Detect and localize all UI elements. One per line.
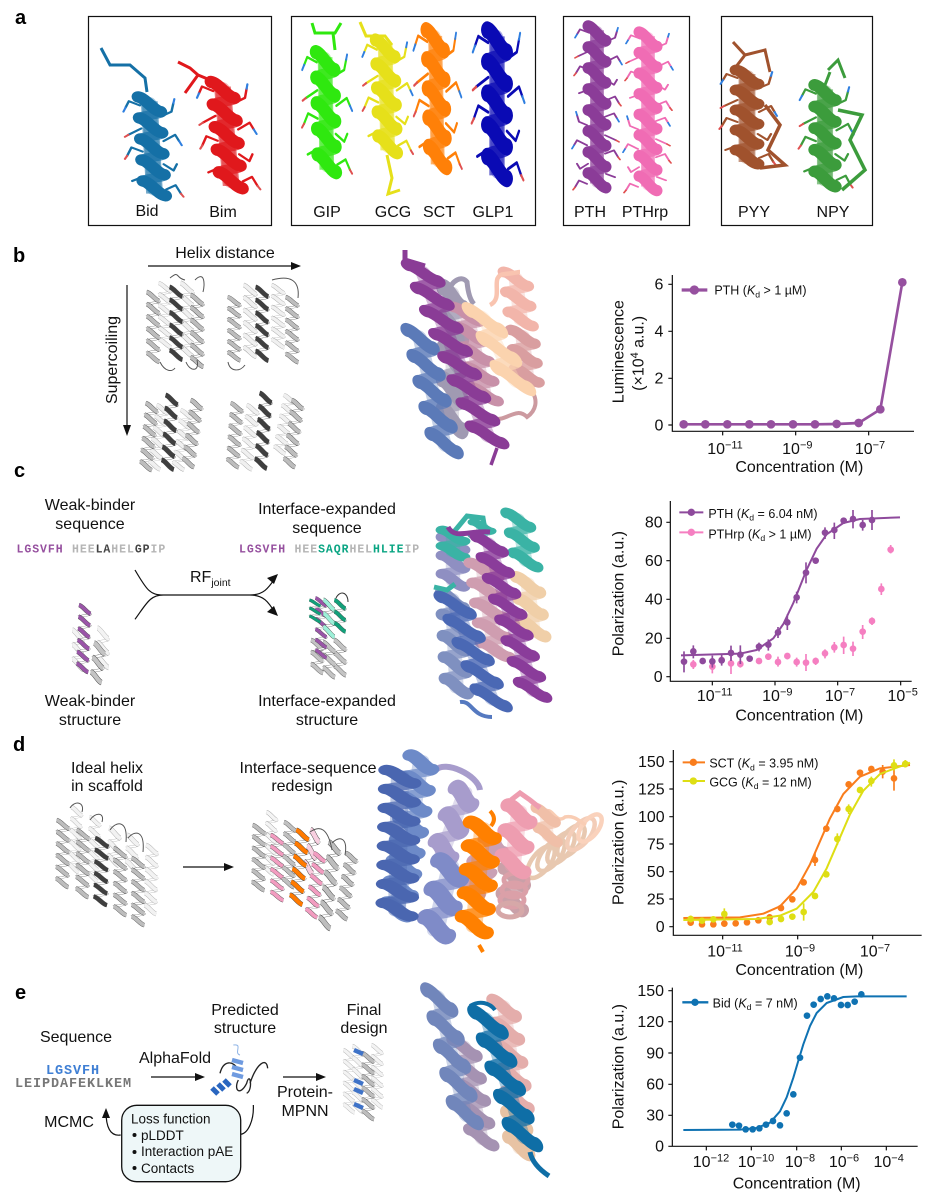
chart: polarization SCT GCG: 10 (785, 944, 803, 961)
chart: polarization PTH PTHrp: > 1 µM) (765, 527, 812, 541)
text: final design (340, 1002, 388, 1037)
chart: polarization Bid: 90 (646, 1045, 664, 1062)
text: weak-binder sequence: Weak-binder (45, 497, 136, 514)
chart: polarization PTH PTHrp: 80 (645, 515, 663, 532)
molecule: SCT binder (383, 755, 606, 952)
chart: polarization Bid: 10 (829, 1154, 847, 1171)
box: loss function (122, 1105, 241, 1182)
chart: polarization Bid (610, 983, 918, 1192)
chart: luminescence: −7 (873, 440, 885, 452)
chart: polarization SCT GCG: 125 (638, 781, 665, 798)
schematic: redesigned interface (252, 812, 358, 928)
box: GIP GCG SCT GLP1: GLP1 (473, 204, 514, 221)
icon: predicted structure (212, 1045, 268, 1094)
chart: polarization SCT GCG: −11 (725, 942, 743, 954)
chart: polarization Bid: 150 (637, 983, 664, 1000)
chart: polarization Bid: −6 (847, 1153, 859, 1165)
box: GIP GCG SCT GLP1: GCG (375, 204, 411, 221)
chart: polarization PTH PTHrp: 10 (888, 688, 905, 705)
label: interface-expanded structure: structure (296, 712, 358, 729)
molecule: expanded binder (434, 513, 546, 717)
axis arrow: supercoiling: Supercoiling (104, 316, 121, 404)
molecule: PTH bound helical bundle (405, 250, 538, 465)
chart: polarization Bid: Bid (K (713, 996, 747, 1010)
chart: polarization SCT GCG: 10 (860, 944, 878, 961)
chart: polarization Bid: −4 (891, 1153, 904, 1165)
chart: polarization SCT GCG: 25 (647, 891, 665, 908)
box: Bid and Bim: Bim (209, 204, 237, 221)
chart: luminescence: d (755, 289, 760, 299)
panel e (15, 982, 918, 1192)
chart: polarization PTH PTHrp: 20 (645, 631, 663, 648)
chart: polarization PTH PTHrp: 40 (645, 592, 663, 609)
chart: luminescence: 2 (654, 371, 663, 388)
box: GIP GCG SCT GLP1: SCT (423, 204, 455, 221)
box: loss function: pLDDT (141, 1128, 184, 1143)
text: ideal helix: Ideal helix (71, 760, 143, 777)
text: weak-binder sequence: HEELAHELGPIP (72, 544, 166, 556)
chart: polarization PTH PTHrp: Concentration (M) (735, 708, 863, 725)
chart: polarization SCT GCG: 150 (638, 754, 665, 771)
chart: polarization PTH PTHrp: −11 (715, 687, 732, 699)
text: weak-binder sequence: sequence (55, 516, 125, 533)
chart: polarization SCT GCG: 100 (638, 809, 665, 826)
chart: polarization PTH PTHrp: Polarization (a.u.) (610, 531, 627, 656)
panel b (13, 245, 914, 476)
text: weak-binder sequence (16, 497, 166, 556)
chart: polarization PTH PTHrp: 10 (697, 688, 715, 705)
chart: luminescence: > 1 µM) (760, 284, 806, 298)
chart: polarization Bid: 30 (646, 1108, 664, 1125)
box: PTH PTHrp: PTHrp (622, 204, 668, 221)
text: final design: design (340, 1020, 388, 1037)
label: weak-binder structure (45, 693, 136, 729)
label: weak-binder structure: Weak-binder (45, 693, 136, 710)
arrow: MCMC: MCMC (44, 1114, 94, 1131)
chart: polarization PTH PTHrp: 0 (654, 669, 663, 686)
text: final design: Final (347, 1002, 381, 1019)
text: ideal helix: in scaffold (71, 778, 143, 795)
chart: polarization SCT GCG: −7 (878, 942, 890, 954)
chart: polarization PTH PTHrp: d (760, 533, 765, 543)
chart: polarization Bid: 10 (693, 1154, 711, 1171)
chart: luminescence: 10 (707, 441, 725, 458)
chart: polarization PTH PTHrp: 10 (825, 688, 843, 705)
arrow: AlphaFold: AlphaFold (139, 1050, 211, 1067)
arrow: ProteinMPNN (277, 1073, 333, 1120)
axis arrow: helix distance: Helix distance (175, 245, 275, 262)
text: interface-expanded sequence: sequence (292, 520, 362, 537)
chart: luminescence: PTH (K (714, 284, 755, 298)
chart: luminescence (610, 275, 914, 476)
text: interface-expanded sequence: HEESAQRHELHLIEIP (294, 544, 420, 556)
chart: polarization SCT GCG: Polarization (a.u.) (610, 780, 627, 905)
chart: polarization SCT GCG: d (754, 781, 759, 791)
chart: polarization Bid: Concentration (M) (733, 1175, 861, 1192)
text: sequence: LEIPDAFEKLKEM (15, 1077, 132, 1092)
box: Bid and Bim: Bid (135, 203, 159, 220)
axis arrow: helix distance (148, 245, 301, 270)
text: predicted structure (211, 1002, 279, 1037)
chart: polarization PTH PTHrp: −7 (843, 687, 855, 699)
arrow: ProteinMPNN: MPNN (281, 1103, 329, 1120)
chart: polarization Bid: 120 (637, 1014, 664, 1031)
box: PYY NPY: NPY (817, 204, 850, 221)
text: weak-binder sequence: LGSVFH (16, 544, 64, 556)
chart: polarization Bid: −8 (803, 1153, 815, 1165)
label d: d (13, 734, 25, 756)
chart: polarization PTH PTHrp (610, 501, 918, 725)
chart: polarization Bid: −12 (711, 1153, 729, 1165)
molecule: Bid binder (427, 990, 549, 1176)
text: predicted structure: Predicted (211, 1002, 279, 1019)
arrow: MCMC (44, 1105, 253, 1135)
chart: luminescence: 4 (654, 324, 663, 341)
text: predicted structure: structure (214, 1020, 276, 1037)
chart: luminescence: 6 (654, 277, 663, 294)
chart: polarization Bid: Polarization (a.u.) (610, 1004, 627, 1129)
box: PYY NPY: PYY (738, 204, 770, 221)
chart: polarization SCT GCG: Concentration (M) (735, 962, 863, 979)
text: ideal helix (71, 760, 143, 795)
chart: polarization PTH PTHrp: PTHrp (K (708, 527, 760, 541)
chart: luminescence: 10 (855, 441, 873, 458)
panel a (15, 7, 872, 226)
label b: b (13, 245, 25, 267)
arrow: RFjoint: RF (190, 569, 211, 586)
chart: luminescence: (×10 (630, 358, 647, 391)
box: GIP GCG SCT GLP1: GIP (313, 204, 341, 221)
icon: final design (343, 1045, 383, 1119)
text: interface-expanded sequence: LGSVFH (239, 544, 286, 556)
chart: luminescence: a.u.) (630, 316, 647, 352)
chart: luminescence: Luminescence (610, 300, 627, 403)
chart: polarization Bid: = 7 nM) (751, 996, 798, 1010)
box: loss function: Contacts (141, 1161, 195, 1176)
chart: polarization PTH PTHrp: −9 (780, 687, 792, 699)
chart: polarization PTH PTHrp: 60 (645, 553, 663, 570)
chart: polarization SCT GCG: GCG (K (709, 775, 754, 789)
box: loss function: Loss function (131, 1112, 211, 1126)
text: interface-sequence redesign (240, 760, 377, 795)
text: interface-sequence redesign: Interface-sequence (240, 760, 377, 777)
chart: luminescence: Concentration (M) (735, 459, 863, 476)
chart: luminescence: −9 (800, 440, 812, 452)
box: loss function: Interaction pAE (141, 1144, 233, 1159)
chart: polarization SCT GCG: 75 (647, 836, 665, 853)
chart: polarization Bid: 60 (646, 1077, 664, 1094)
label c: c (14, 460, 25, 482)
text: sequence (15, 1029, 132, 1092)
arrow: RFjoint: joint (210, 577, 231, 589)
box: PTH PTHrp (564, 16, 690, 226)
label: weak-binder structure: structure (59, 712, 121, 729)
box: GIP GCG SCT GLP1 (292, 16, 536, 226)
chart: polarization Bid: 10 (738, 1154, 756, 1171)
box: PYY NPY (719, 16, 872, 226)
chart: polarization SCT GCG: = 3.95 nM) (755, 757, 818, 771)
chart: polarization SCT GCG (610, 750, 922, 979)
label a: a (15, 7, 27, 29)
text: interface-sequence redesign: redesign (271, 778, 333, 795)
chart: luminescence: 0 (654, 417, 663, 434)
panel c (14, 460, 918, 729)
structure: weak binder (72, 605, 109, 683)
arrow: ProteinMPNN: Protein- (277, 1084, 333, 1101)
chart: polarization SCT GCG: 50 (647, 864, 665, 881)
chart: polarization PTH PTHrp: −5 (905, 687, 918, 699)
text: interface-expanded sequence (239, 501, 420, 556)
chart: polarization Bid: 0 (655, 1139, 664, 1156)
schematic: ideal helix scaffold (56, 803, 158, 925)
structure: interface expanded (309, 593, 348, 677)
arrow: redesign (183, 863, 234, 871)
chart: polarization SCT GCG: −9 (803, 942, 815, 954)
chart: polarization PTH PTHrp: d (749, 513, 754, 523)
chart: polarization Bid: −10 (756, 1153, 774, 1165)
chart: polarization SCT GCG: = 12 nM) (759, 775, 812, 789)
label: interface-expanded structure (258, 693, 396, 729)
chart: polarization Bid: 10 (874, 1154, 891, 1171)
chart: luminescence: −11 (725, 440, 743, 452)
scaffold grid schematic (139, 275, 304, 470)
arrow: RFjoint (135, 569, 278, 619)
arrow: AlphaFold (139, 1050, 211, 1081)
chart: luminescence: 10 (782, 441, 800, 458)
chart: polarization PTH PTHrp: 10 (762, 688, 780, 705)
chart: polarization Bid: 10 (785, 1154, 803, 1171)
chart: polarization PTH PTHrp: = 6.04 nM) (754, 507, 818, 521)
chart: luminescence: 4 (629, 352, 641, 358)
panel d (13, 734, 922, 979)
chart: polarization PTH PTHrp: PTH (K (708, 507, 749, 521)
text: sequence: LGSVFH (46, 1064, 100, 1079)
chart: polarization SCT GCG: 10 (707, 944, 725, 961)
axis arrow: supercoiling (104, 285, 131, 436)
chart: polarization SCT GCG: d (750, 762, 755, 772)
box: Bid and Bim (88, 16, 272, 226)
label: interface-expanded structure: Interface-expanded (258, 693, 396, 710)
text: interface-expanded sequence: Interface-expanded (258, 501, 396, 518)
box: PTH PTHrp: PTH (574, 204, 606, 221)
label e: e (15, 982, 26, 1004)
chart: polarization SCT GCG: 0 (656, 919, 665, 936)
text: sequence: Sequence (40, 1029, 112, 1046)
chart: polarization Bid: d (747, 1002, 752, 1012)
chart: polarization SCT GCG: SCT (K (709, 757, 750, 771)
